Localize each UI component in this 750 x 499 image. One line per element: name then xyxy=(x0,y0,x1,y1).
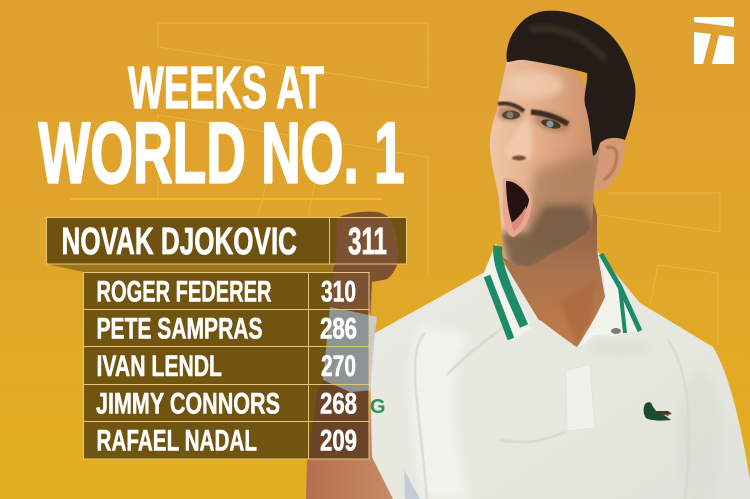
row: roger federer: 310 xyxy=(321,276,356,308)
brow left xyxy=(498,103,524,111)
chin stubble xyxy=(500,205,596,272)
row: ivan lendl: IVAN LENDL xyxy=(96,350,222,383)
shirt placket xyxy=(566,365,595,431)
lower forearm xyxy=(306,272,395,499)
row: roger federer: ROGER FEDERER xyxy=(96,276,272,308)
panel: leaderboard xyxy=(46,212,407,459)
button xyxy=(611,328,621,334)
icon: tennis logo xyxy=(694,17,734,64)
panel: leader row background xyxy=(47,218,407,264)
sleeve highlight xyxy=(411,325,470,499)
tongue xyxy=(511,206,526,231)
player photo illustration: head xyxy=(490,11,635,272)
forearm through panel xyxy=(308,380,369,459)
shirt folds xyxy=(415,320,689,499)
mouth interior xyxy=(506,181,529,223)
collar flap under chest xyxy=(527,320,577,372)
title underline xyxy=(70,198,382,200)
faint court lines xyxy=(158,23,720,345)
cheek stubble xyxy=(523,150,599,232)
collar right stripes xyxy=(601,254,640,333)
collar left stripes xyxy=(487,246,524,339)
row: pete sampras: PETE SAMPRAS xyxy=(96,312,262,346)
face shading xyxy=(497,71,600,272)
row: novak djokovic: 311 xyxy=(348,221,387,263)
row: ivan lendl: 270 xyxy=(321,350,356,383)
chest shadow xyxy=(560,280,596,347)
row: jimmy connors: JIMMY CONNORS xyxy=(96,388,280,420)
nostril xyxy=(512,156,526,160)
neck and chest xyxy=(503,190,605,347)
shaded shirt areas xyxy=(678,370,722,499)
nose xyxy=(505,118,532,161)
brow right xyxy=(531,112,568,124)
row: jimmy connors: 268 xyxy=(320,388,357,420)
row: novak djokovic: NOVAK DJOKOVIC xyxy=(62,221,297,263)
wristband through panel xyxy=(323,307,369,392)
wristband outside panel xyxy=(369,315,377,392)
hair xyxy=(506,11,635,156)
shirt body xyxy=(370,252,750,499)
band shadow xyxy=(47,264,369,272)
icon: crocodile logo xyxy=(644,402,672,421)
row: rafael nadal: RAFAEL NADAL xyxy=(96,424,257,458)
eye left xyxy=(502,110,520,120)
eye right xyxy=(540,118,562,130)
ear inner xyxy=(603,147,617,180)
eye socket left xyxy=(497,105,523,121)
panel: other rows background xyxy=(83,272,369,459)
hair highlight xyxy=(530,28,605,60)
eye socket right xyxy=(533,110,570,134)
heading: weeks at: WEEKS AT xyxy=(128,55,324,121)
title xyxy=(38,55,404,202)
face xyxy=(490,60,600,268)
ear xyxy=(590,137,625,190)
collar left xyxy=(483,243,532,342)
player photo illustration: body xyxy=(306,190,750,499)
fist overlay xyxy=(330,212,398,313)
forehead highlight xyxy=(507,71,563,99)
sleeve logo letter: G xyxy=(370,396,386,418)
collar right xyxy=(577,252,642,349)
row: pete sampras: 286 xyxy=(320,312,357,346)
row: rafael nadal: 209 xyxy=(320,424,357,458)
heading: world no. 1: WORLD NO. 1 xyxy=(38,106,404,202)
mouth lips xyxy=(503,178,532,237)
panel borders xyxy=(46,218,406,459)
row: ivan lendl xyxy=(96,350,356,383)
